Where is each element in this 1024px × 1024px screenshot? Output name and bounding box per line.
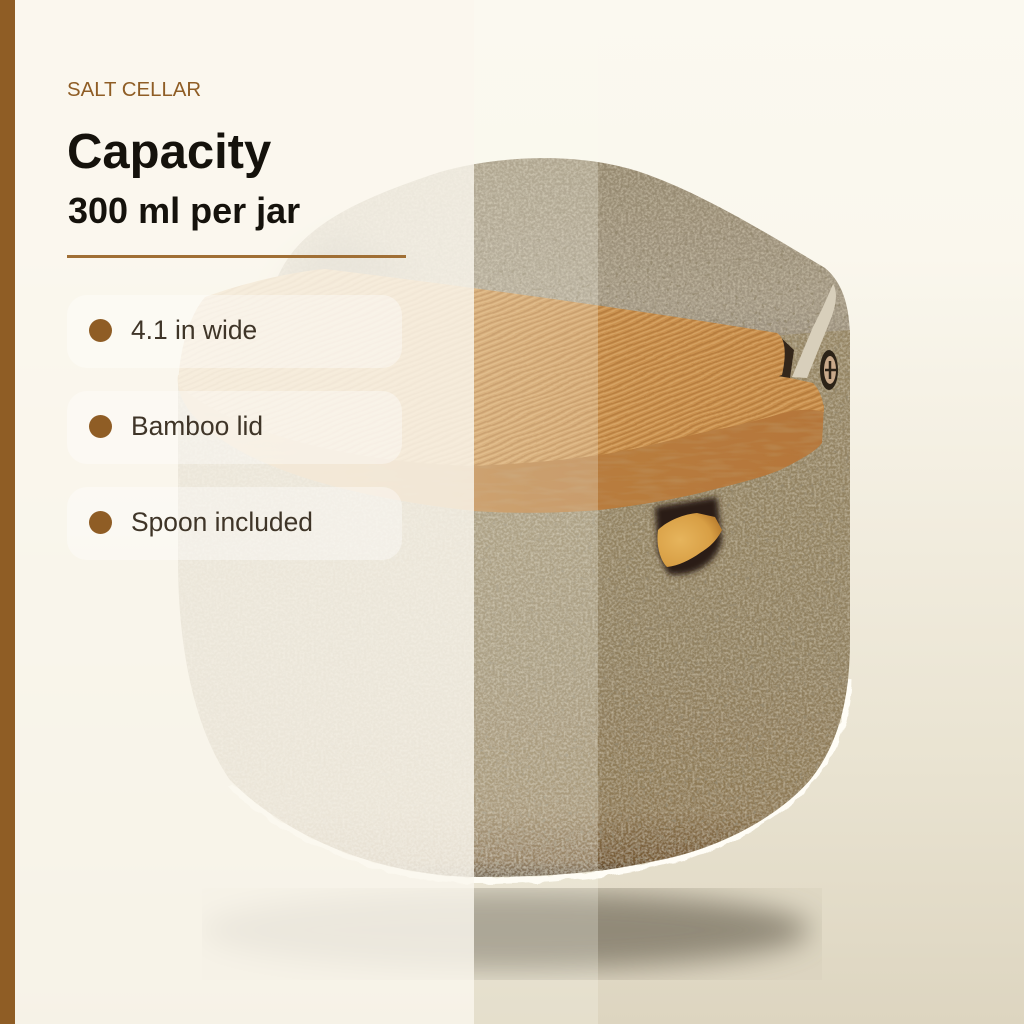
panel: left translucent overlay — [15, 0, 474, 1024]
white cut-out halo — [230, 680, 849, 881]
divider — [67, 255, 406, 258]
left accent bar — [0, 0, 15, 1024]
floor shadow — [200, 888, 822, 980]
feature: spoon — [67, 487, 402, 560]
screw — [820, 350, 838, 390]
feature: width — [67, 295, 402, 368]
panel: middle translucent strip — [474, 0, 598, 1024]
eyebrow label: SALT CELLAR — [67, 79, 201, 101]
jar body — [178, 330, 850, 877]
bamboo lid rear half — [206, 269, 785, 376]
feature: spoon: Spoon included — [131, 507, 313, 537]
back wall contact shadow — [275, 235, 420, 300]
jar rim inner edge — [792, 284, 836, 378]
bamboo lid side edge — [178, 375, 824, 513]
product photo: salt cellar jar — [178, 158, 852, 980]
bamboo lid top surface — [178, 298, 824, 466]
feature: lid: Bamboo lid — [131, 411, 263, 441]
feature: width: 4.1 in wide — [131, 315, 257, 345]
title: Capacity — [67, 125, 271, 179]
lid gap shadow — [770, 333, 794, 378]
spoon slot and spoon — [655, 497, 722, 575]
jar back wall — [270, 158, 850, 420]
subtitle: 300 ml per jar — [68, 190, 300, 231]
feature: lid — [67, 391, 402, 464]
